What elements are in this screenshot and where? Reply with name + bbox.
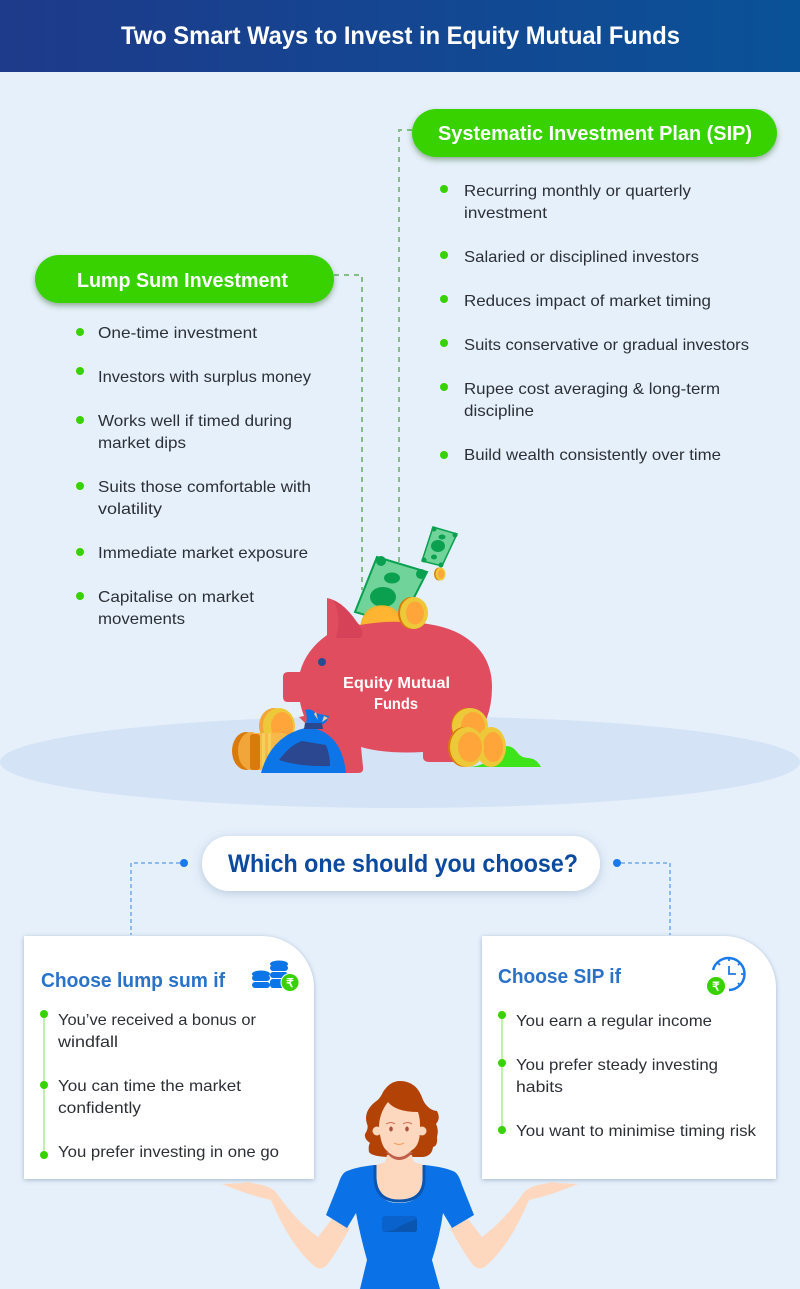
icon: coin entering slot — [361, 606, 403, 625]
SIP list text: Rupee cost averaging & long-term — [464, 381, 720, 398]
lump sum list text: market dips — [98, 435, 186, 452]
card list text: You prefer investing in one go — [58, 1144, 279, 1161]
connector: question to lump sum card — [131, 859, 188, 935]
illustration: woman shrugging — [222, 1081, 578, 1289]
coin on pig — [398, 597, 428, 629]
card background — [24, 936, 314, 1179]
card list text — [516, 1013, 757, 1140]
heading: lump sum investment — [35, 255, 334, 303]
connector: SIP to piggy bank — [399, 130, 412, 570]
arms — [222, 1182, 350, 1268]
piggy bank label — [343, 675, 450, 713]
SIP list text: Build wealth consistently over time — [464, 447, 721, 464]
card list text: You can time the market — [58, 1078, 242, 1095]
lump sum list text: Investors with surplus money — [98, 369, 311, 386]
card list text: You’ve received a bonus or — [58, 1012, 257, 1029]
icon: money bag — [261, 709, 346, 773]
SIP list text — [464, 183, 749, 464]
SIP list text: investment — [464, 205, 548, 222]
card list text: You prefer steady investing — [516, 1057, 718, 1074]
SIP list text: Salaried or disciplined investors — [464, 249, 699, 266]
card list text: confidently — [58, 1100, 141, 1117]
lump sum list text: Capitalise on market — [98, 589, 255, 606]
title banner: Two Smart Ways to Invest in Equity Mutual Funds — [121, 22, 680, 50]
shirt — [326, 1165, 474, 1289]
pig ear — [327, 598, 362, 638]
hair — [365, 1081, 439, 1157]
SIP list text: Suits conservative or gradual investors — [464, 337, 749, 354]
icon: coin stacks with rupee: ₹ — [286, 976, 294, 990]
icon: clock with rupee — [707, 958, 744, 995]
heading: which one should you choose: Which one should you choose? — [228, 850, 578, 878]
timeline — [498, 1011, 506, 1134]
piggy bank label: Equity Mutual — [343, 675, 450, 692]
bullet dots — [440, 185, 448, 459]
card list text: windfall — [57, 1034, 118, 1051]
SIP list text: discipline — [464, 403, 534, 420]
card heading: Choose SIP if — [498, 966, 621, 988]
title banner — [0, 0, 800, 72]
icon: clock with rupee: ₹ — [712, 980, 720, 994]
icon: coin stacks with rupee — [252, 960, 299, 992]
icon: falling coin — [434, 568, 446, 580]
lump sum list text: movements — [98, 611, 185, 628]
card heading: Choose lump sum if — [41, 970, 225, 992]
bullet dots — [76, 328, 84, 600]
neck shadow — [386, 1152, 413, 1160]
panel: choose lump sum — [24, 936, 314, 1179]
connector: question to SIP card — [613, 859, 670, 935]
shirt pocket — [382, 1216, 417, 1232]
panel: lump sum investment — [35, 255, 334, 628]
heading: which one should you choose — [202, 836, 600, 891]
lump sum list text — [98, 325, 311, 628]
coins: right stack — [448, 708, 506, 767]
coins: left stack — [232, 708, 295, 770]
heading: SIP — [412, 109, 777, 157]
lump sum list text: Immediate market exposure — [98, 545, 308, 562]
card list text — [57, 1012, 279, 1161]
lump sum list text: One-time investment — [98, 325, 258, 342]
piggy bank label: Funds — [374, 696, 418, 713]
SIP list text: Recurring monthly or quarterly — [464, 183, 691, 200]
card background — [482, 936, 776, 1179]
heading: lump sum investment: Lump Sum Investment — [77, 270, 288, 292]
panel: choose SIP — [482, 936, 776, 1179]
lump sum list text: Suits those comfortable with — [98, 479, 311, 496]
ground ellipse — [0, 716, 800, 808]
lump sum list text: Works well if timed during — [98, 413, 292, 430]
SIP list text: Reduces impact of market timing — [464, 293, 711, 310]
card list text: You earn a regular income — [516, 1013, 712, 1030]
shirt neckline — [375, 1165, 424, 1201]
pig eye — [318, 658, 326, 666]
card list text: habits — [516, 1079, 563, 1096]
pig body — [283, 600, 492, 773]
face — [372, 1102, 426, 1157]
icon: small banknote — [422, 526, 458, 568]
connector: lump sum to piggy bank — [334, 275, 362, 590]
icon: large banknote — [355, 556, 427, 625]
timeline — [40, 1010, 48, 1159]
illustration: piggy bank — [232, 526, 541, 773]
green bush — [470, 746, 541, 767]
card list text: You want to minimise timing risk — [516, 1123, 757, 1140]
lump sum list text: volatility — [98, 501, 162, 518]
panel: systematic investment plan — [412, 109, 777, 464]
heading: SIP: Systematic Investment Plan (SIP) — [438, 123, 752, 145]
neck and chest — [376, 1155, 424, 1201]
